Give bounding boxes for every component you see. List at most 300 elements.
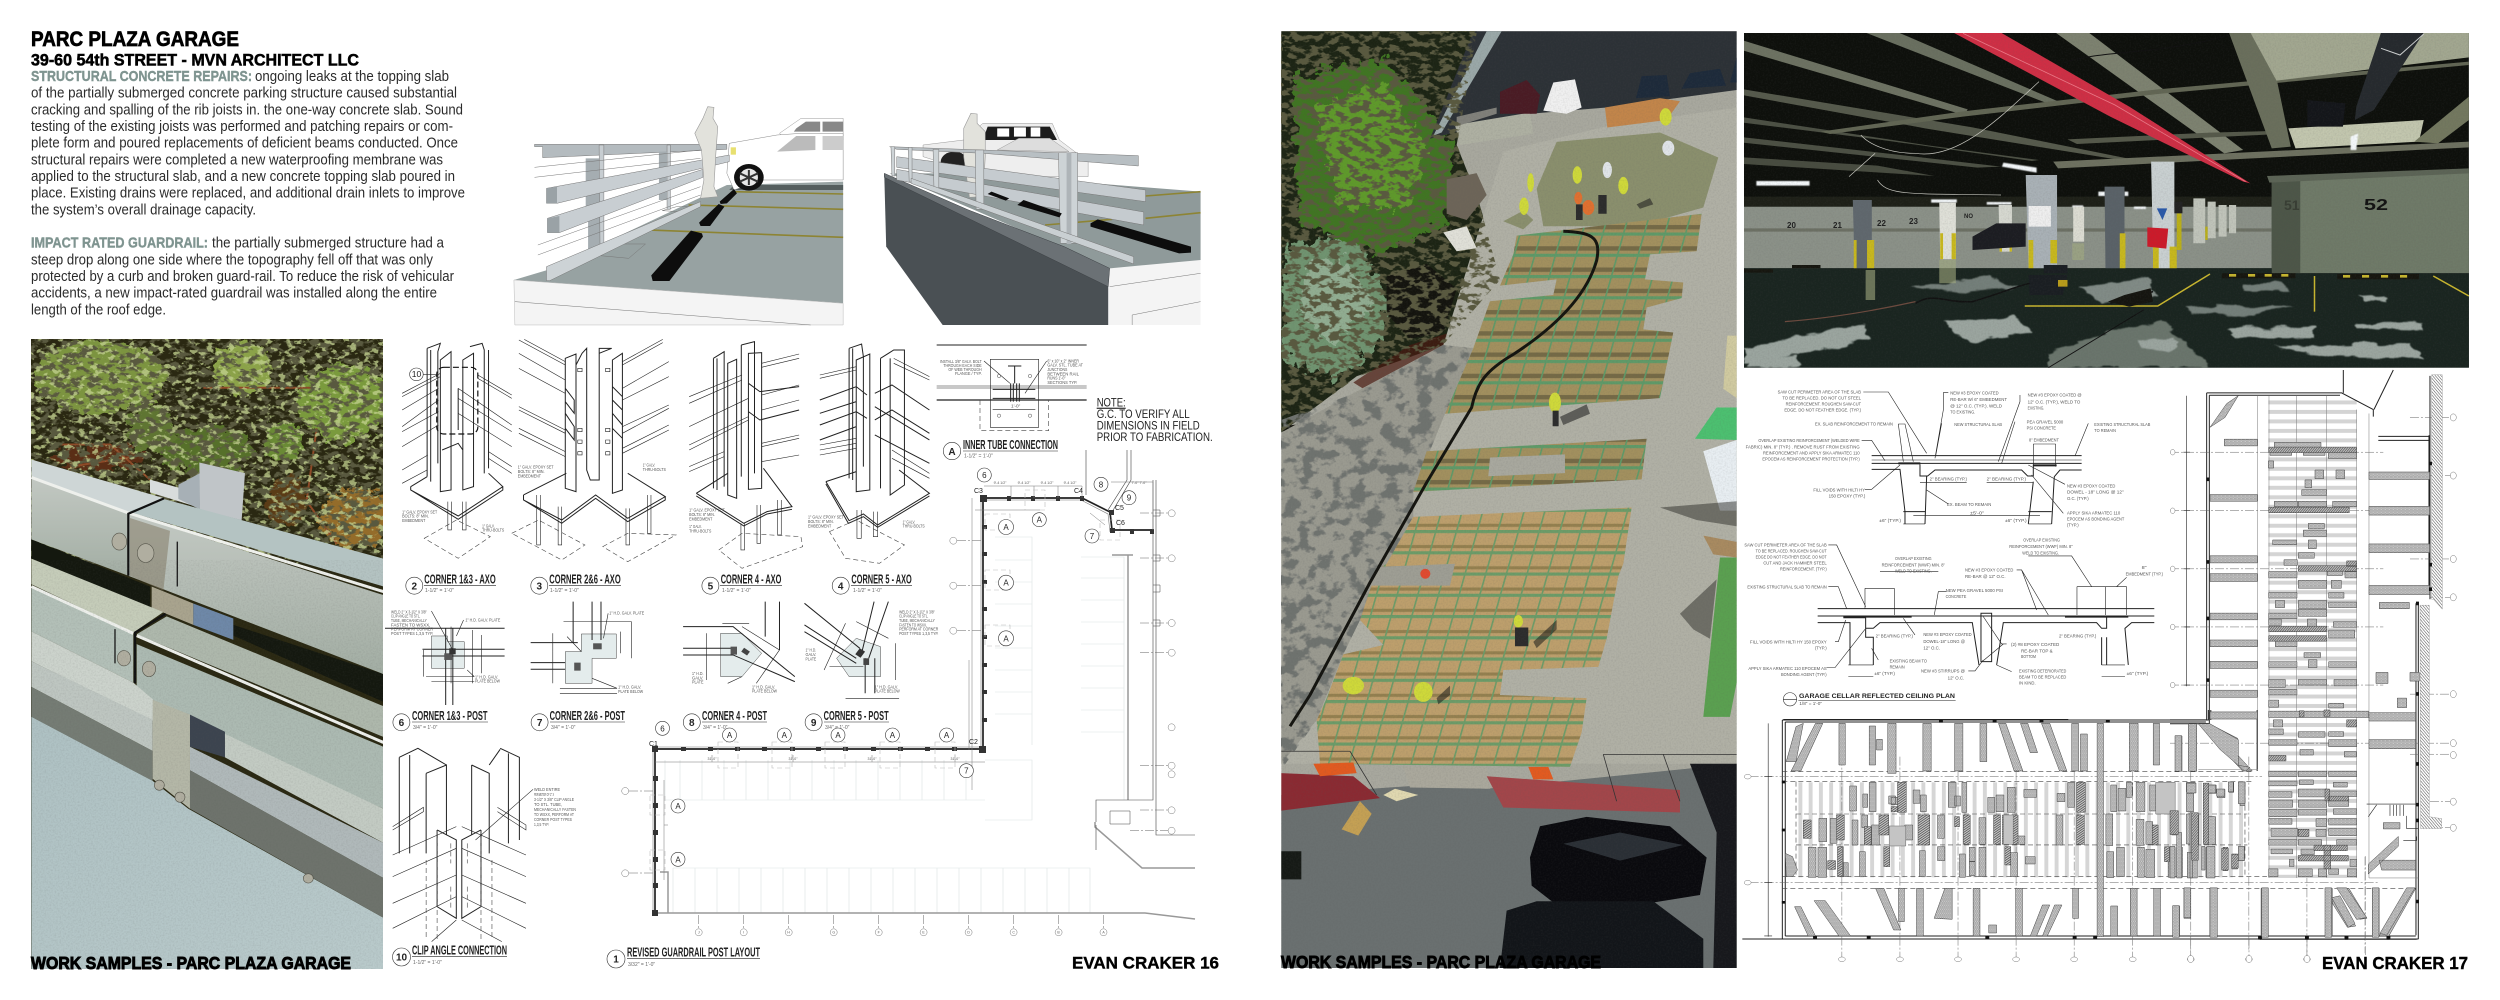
text block: impact rated guardrail: protected by a curb and broken guard-rail. To reduce the risk of vehicular xyxy=(31,268,454,285)
title: inner tube connection: A xyxy=(948,447,956,458)
title: PARC PLAZA GARAGE xyxy=(31,28,239,51)
section: lower beam replacement: 2" BEARING (TYP.) xyxy=(1876,633,1913,638)
section: upper slab repair: RE-BAR W/ 6" EMBEDMENT xyxy=(1950,397,2007,402)
plan labels and markers: A xyxy=(835,731,841,740)
plan labels and markers: A xyxy=(727,731,733,740)
title: corner 4 post: 8 xyxy=(689,718,695,729)
plan labels and markers: A xyxy=(1003,579,1009,588)
section: upper slab repair: 2" BEARING (TYP.) xyxy=(1930,476,1967,481)
section: upper slab repair: DOWEL - 18" LONG @ 12" xyxy=(2067,490,2124,495)
text block: impact rated guardrail xyxy=(31,235,454,318)
post detail: corner 5: TUBE, MECHANICALLY xyxy=(899,618,935,624)
ceiling lights xyxy=(1756,133,2358,209)
bolts and seams xyxy=(112,498,313,883)
plan labels and markers: 7'-0" xyxy=(1140,481,1147,485)
plan labels and markers: C6 xyxy=(1116,520,1125,527)
drawing: clip angle connection xyxy=(393,748,533,942)
section: lower beam replacement: OVERLAP EXISTING xyxy=(2023,538,2060,543)
footer caption, page 16: WORK SAMPLES - PARC PLAZA GARAGE xyxy=(31,953,351,973)
grid bubbles xyxy=(1744,774,2310,962)
drawing: inner tube connection: SECTIONS TYP. xyxy=(1047,380,1077,385)
post detail: corner 5: 1" H.D. GALV. xyxy=(875,684,898,690)
evergreen foliage xyxy=(31,339,393,564)
section: lower beam replacement: BOTTOM xyxy=(2021,654,2036,659)
axo: corner 1&3: BOLTS: 8" MIN. xyxy=(402,514,429,520)
guardrail posts and rails xyxy=(890,147,1146,264)
axo: corner 5: BOLTS: 8" MIN. xyxy=(808,519,834,525)
wheel stops xyxy=(988,192,1191,253)
post detail: corner 5: 1" H.D. xyxy=(806,648,816,654)
note: clip angle weld: 3-1/2" X 3/8" CLIP ANGLE xyxy=(534,797,574,802)
section: upper slab repair: EPOCEM AS REINFORCEMENT PROTECTION (TYP.) xyxy=(1762,457,1860,462)
plan labels and markers: D xyxy=(967,930,970,934)
plan labels and markers: C xyxy=(1012,930,1015,934)
plan labels and markers: J xyxy=(698,930,700,934)
section: upper slab repair: NEW STRUCTURAL SLAB xyxy=(1954,422,2002,427)
subtitle: 39-60 54th STREET - MVN ARCHITECT LLC xyxy=(31,50,359,70)
drawing titles xyxy=(392,571,912,968)
plan labels and markers: A xyxy=(1003,634,1009,643)
section: upper slab repair: EXISTING STRUCTURAL SLAB xyxy=(2094,422,2150,427)
text block: structural concrete repairs: place. Existing drains were replaced, and additional drain inlets to improve xyxy=(31,185,465,202)
photo: galvanized guardrail joint xyxy=(31,339,393,971)
plan labels and markers: F xyxy=(878,930,880,934)
section: upper slab repair: PEA GRAVEL 5000 xyxy=(2027,419,2064,424)
trees and undergrowth xyxy=(1281,31,1484,432)
workers xyxy=(1343,108,1674,704)
red sprinkler pipe xyxy=(1954,33,2250,183)
section: lower beam replacement: EXISTING STRUCTURAL SLAB TO REMAIN xyxy=(1747,584,1827,589)
plan labels and markers: I xyxy=(743,930,744,934)
note: clip angle weld: CORNER POST TYPES xyxy=(534,817,572,822)
drawing: structural repair sections xyxy=(1744,390,2163,719)
columns xyxy=(1782,720,2390,939)
plan labels and markers: 9'-4 1/2" xyxy=(994,481,1007,485)
section: upper slab repair: PSI CONCRETE xyxy=(2027,425,2056,430)
drawing: inner tube connection: RUNS 1'-0" xyxy=(1047,376,1066,381)
title: corner 1&3 post: 3/4" = 1'-0" xyxy=(413,725,438,731)
title: clip angle connection: 10 xyxy=(396,952,407,964)
panel: 3D rendering of guardrail, outside elevation xyxy=(884,113,1201,325)
title: corner 2&6 axo: CORNER 2&6 - AXO xyxy=(549,571,621,586)
text block: impact rated guardrail: steep drop along one side where the topography fell off that was only xyxy=(31,251,433,268)
title: corner 2&6 axo: 1-1/2" = 1'-0" xyxy=(550,588,579,594)
title: corner 1&3 axo: 2 xyxy=(412,582,418,592)
plan labels and markers: 31'-0" xyxy=(951,757,960,761)
section: upper slab repair: REINFORCEMENT. ROUGHEN SAW-CUT xyxy=(1786,402,1861,407)
axo: corner 4: EMBEDMENT xyxy=(689,516,712,522)
drawing: revised guardrail post layout plan xyxy=(622,450,1195,936)
post detail: corner 4: 1" H.D. xyxy=(692,671,703,677)
text block: structural concrete repairs: of the partially submerged concrete parking structure caused substantial xyxy=(31,85,457,102)
section: upper slab repair: FILL VOIDS WITH HILTI HY xyxy=(1813,487,1865,492)
plan labels and markers: A xyxy=(1037,516,1043,525)
text block: structural concrete repairs xyxy=(31,68,465,218)
section: upper slab repair: TO REMAIN xyxy=(2094,428,2116,433)
title: revised guardrail post layout: 1 xyxy=(613,954,619,966)
white car xyxy=(727,118,843,191)
axo: corner 1&3: 1" GALV. xyxy=(482,523,495,529)
post detail: corner 5: PLATE BELOW xyxy=(875,689,900,695)
text block: impact rated guardrail: IMPACT RATED GUARDRAIL: xyxy=(31,235,208,252)
drawing: inner tube connection xyxy=(937,345,1087,431)
section: lower beam replacement xyxy=(1744,538,2163,685)
title: revised guardrail post layout: 3/32" = 1'-0" xyxy=(628,962,655,968)
section: upper slab repair: EXISTING. xyxy=(2028,405,2044,410)
section: upper slab repair: 12" O.C. (TYP.), WELD TO xyxy=(2028,399,2081,404)
axo: corner 4: THRU-BOLTS xyxy=(689,528,711,534)
plan labels and markers: A xyxy=(1102,930,1105,934)
post detail: corner 2&6 xyxy=(531,602,645,695)
section: lower beam replacement: REINFORCEMENT (WWF) MIN. 8" xyxy=(2009,544,2073,549)
plan labels and markers: 7'-0" xyxy=(1132,481,1139,485)
section: lower beam replacement: TO BE REPLACED. ROUGHEN SAW-CUT xyxy=(1756,549,1827,554)
title: corner 5 post xyxy=(805,708,889,731)
title: corner 2&6 post xyxy=(531,708,625,731)
post detail: corner 1&3: CLIP ANGLE TO STL. xyxy=(391,614,420,620)
upper rail xyxy=(31,460,383,674)
section: upper slab repair: ±6" (TYP.) xyxy=(1879,518,1901,523)
numbers on walls xyxy=(1787,199,2388,228)
title: clip angle connection xyxy=(392,942,507,966)
wheel stops xyxy=(651,189,737,281)
post detail: corner 1&3: 1" H.D. GALV. PLATE xyxy=(465,618,501,624)
lower rail xyxy=(31,559,383,809)
note: verify dimensions xyxy=(1097,398,1213,444)
post detail: corner 4: PLATE xyxy=(692,680,704,686)
axo: corner 2&6 xyxy=(512,339,676,562)
post detail: corner 5 xyxy=(804,602,939,698)
post detail: corner 1&3: WELD 2" X 3-1/2" X 3/8" xyxy=(391,609,427,615)
section: lower beam replacement: EXISTING BEAM TO xyxy=(1890,658,1927,663)
plan labels and markers: 6 xyxy=(982,471,987,480)
drawing: inner tube connection: GALV. STL. TUBE AT xyxy=(1047,363,1083,368)
text block: impact rated guardrail: the partially submerged structure had a xyxy=(212,235,445,252)
section: lower beam replacement: REMAIN xyxy=(1890,664,1905,669)
note: clip angle weld: TO WSXX, PERFORM AT xyxy=(534,812,574,817)
fresh poured concrete xyxy=(1537,132,1718,226)
title: revised guardrail post layout xyxy=(607,945,760,968)
title: corner 2&6 post: 7 xyxy=(537,718,543,729)
title: inner tube connection: 1-1/2" = 1'-0" xyxy=(964,454,993,460)
text block: structural concrete repairs: cracking and spalling of the rib joists in. the one-way concrete slab. Sound xyxy=(31,101,463,118)
plan labels and markers: 8 xyxy=(1099,480,1104,489)
columns xyxy=(1852,162,2236,268)
title: garage cellar reflected ceiling plan xyxy=(1783,693,2068,719)
section: upper slab repair: (TYP.) xyxy=(2067,523,2079,528)
section: lower beam replacement: 8" xyxy=(2142,565,2147,570)
post stub behind the rail xyxy=(150,462,245,640)
axo: corner 5: 1" GALV. EPOXY SET xyxy=(808,515,844,521)
axo: corner 4: BOLTS: 8" MIN. xyxy=(689,512,715,518)
section: upper slab repair: NEW #3 EPOXY COATED xyxy=(2067,483,2116,488)
drawing: inner tube connection: 6" x 10" x 2" INNER xyxy=(1047,359,1079,364)
section: upper slab repair: O.C. (TYP.) xyxy=(2067,496,2089,501)
title: corner 1&3 axo: CORNER 1&3 - AXO xyxy=(424,571,496,586)
section: lower beam replacement: NEW PEA GRAVEL 5000 PSI xyxy=(1946,588,2003,593)
section: lower beam replacement: BONDING AGENT (TYP.) xyxy=(1781,672,1827,677)
drawing: inner tube connection: INSTALL 3/8" GALV. BOLT xyxy=(940,359,982,364)
section: lower beam replacement: CONCRETE xyxy=(1946,594,1966,599)
section: lower beam replacement: WELD TO EXISTING. xyxy=(1895,569,1932,574)
title: corner 1&3 post xyxy=(393,708,488,731)
numbers on walls: 21 xyxy=(1833,221,1842,230)
plan labels and markers: H xyxy=(787,930,790,934)
post detail: corner 5: FASTEN TO WSXX, xyxy=(899,622,927,628)
section: upper slab repair: EPOCEM AS BONDING AGENT xyxy=(2067,517,2124,522)
post detail: corner 4 xyxy=(683,602,795,695)
section: lower beam replacement: CUT AND JACK HAMMER STEEL xyxy=(1763,561,1827,566)
concrete pump hose xyxy=(1290,231,1598,726)
plan labels and markers: 9 xyxy=(1127,494,1132,503)
section: upper slab repair: SAW CUT PERIMETER AREA OF THE SLAB xyxy=(1778,390,1861,395)
drawing: ceiling plan, lower wing xyxy=(1742,710,2418,962)
drawing set: corner axonometrics and post details xyxy=(385,339,939,705)
plan labels and markers: 6 xyxy=(660,724,665,733)
footer page label 17: EVAN CRAKER 17 xyxy=(2322,953,2468,973)
section: lower beam replacement: (TYP.) xyxy=(1815,645,1827,650)
section: upper slab repair: @ 12" O.C. (TYP.). WELD xyxy=(1950,403,2003,408)
section: lower beam replacement: ±6" (TYP.) xyxy=(1874,671,1895,676)
section: lower beam replacement: (2) #8 EPOXY COATED xyxy=(2011,642,2060,647)
numbers on walls: 51 xyxy=(2284,197,2300,213)
section: lower beam replacement: APPLY SIKA ARMATEC 110 EPOCEM AS xyxy=(1748,666,1827,671)
text block: structural concrete repairs: structural repairs were completed a new waterproofing membrane was xyxy=(31,151,443,168)
note: clip angle weld xyxy=(534,787,576,827)
post detail: corner 5: CLIP ANGLE TO STL. xyxy=(899,614,928,620)
section: lower beam replacement: WELD TO EXISTING. xyxy=(2022,550,2059,555)
photo: wet garage interior with red sprinkler pipe xyxy=(1744,33,2469,368)
grid line bubbles xyxy=(622,510,1175,936)
note: verify dimensions: G.C. TO VERIFY ALL xyxy=(1097,409,1190,421)
section: lower beam replacement: ±6" (TYP.) xyxy=(2127,671,2149,676)
section: upper slab repair: NEW #3 EPOXY COATED @ xyxy=(2028,393,2082,398)
title: corner 5 axo xyxy=(832,571,912,594)
note: verify dimensions: PRIOR TO FABRICATION. xyxy=(1097,432,1213,444)
title: clip angle connection: CLIP ANGLE CONNECTION xyxy=(412,942,507,957)
detail markers A xyxy=(656,468,1136,866)
post detail: corner 4: 1" H.D. GALV. xyxy=(752,684,775,690)
section: lower beam replacement: 12" O.C. xyxy=(1923,645,1940,650)
plan labels and markers: A xyxy=(782,731,788,740)
plan labels and markers: C2 xyxy=(969,739,978,746)
posts xyxy=(652,495,1154,916)
dimension strings xyxy=(655,482,1153,880)
section: upper slab repair: APPLY SIKA ARMATEC 110 xyxy=(2067,510,2121,515)
numbers on walls: 52 xyxy=(2364,197,2388,214)
post detail: corner 1&3: PERFORM AT CORNER xyxy=(391,627,434,633)
post detail: corner 2&6: PLATE BELOW xyxy=(618,689,643,695)
section: upper slab repair: 2" BEARING (TYP.) xyxy=(1987,476,2026,481)
axo: corner 5 xyxy=(808,344,929,563)
hatched repair patches xyxy=(1803,782,2228,877)
plan labels and markers: 7 xyxy=(964,767,969,776)
title: corner 4 axo: 1-1/2" = 1'-0" xyxy=(722,588,751,594)
text block: structural concrete repairs: the system’s overall drainage capacity. xyxy=(31,201,256,218)
section: upper slab repair: 8" EMBEDMENT xyxy=(2029,438,2059,443)
axo: corner 2&6: 1" GALV. xyxy=(643,463,655,469)
curb and post base xyxy=(31,631,383,971)
title: garage cellar reflected ceiling plan: GARAGE CELLAR REFLECTED CEILING PLAN xyxy=(1799,693,1955,700)
axo: corner 2&6: EMBEDMENT xyxy=(518,473,541,479)
drawing: inner tube connection: JUNCTIONS xyxy=(1047,367,1067,372)
parking stalls (faint) xyxy=(665,537,1124,913)
tree canopy speckle xyxy=(1281,31,1500,432)
person figure xyxy=(695,107,718,198)
section: lower beam replacement: EXISTING DETERIORATED xyxy=(2019,669,2067,674)
section: lower beam replacement: REINFORCEMENT. (TYP.) xyxy=(1780,567,1827,572)
stippled repair patches xyxy=(1785,723,2416,937)
section: upper slab repair: EDGE. DO NOT FEATHER EDGE. (TYP.) xyxy=(1784,408,1861,413)
section: lower beam replacement: RE-BAR @ 12" O.C. xyxy=(1965,574,2006,579)
section: upper slab repair: ±6" (TYP.) xyxy=(2005,518,2027,523)
section: lower beam replacement: NEW #3 EPOXY COATED xyxy=(1923,632,1972,637)
title: corner 5 axo: 4 xyxy=(838,582,844,592)
parking stripes and wheel stops xyxy=(1744,265,2469,368)
text block: structural concrete repairs: plete form and poured replacements of deficient beams conducted. Once xyxy=(31,135,458,152)
plan labels and markers: A xyxy=(944,731,950,740)
numbers on walls: 23 xyxy=(1909,217,1918,226)
numbers on walls: 20 xyxy=(1787,221,1796,230)
parked cars xyxy=(923,123,1088,177)
axo: corner 1&3 xyxy=(402,343,512,558)
wet floor xyxy=(1744,243,2469,368)
post detail: corner 1&3 xyxy=(385,609,505,705)
title: inner tube connection: INNER TUBE CONNECTION xyxy=(963,437,1058,452)
section: lower beam replacement: REINFORCEMENT (WWF) MIN. 8" xyxy=(1882,562,1945,567)
plan labels and markers: C4 xyxy=(1074,488,1083,495)
large concrete girder at right xyxy=(2229,33,2469,148)
text block: structural concrete repairs: STRUCTURAL CONCRETE REPAIRS: xyxy=(31,68,252,85)
title: corner 4 axo: CORNER 4 - AXO xyxy=(721,571,781,586)
plan labels and markers: A xyxy=(675,855,681,864)
title: corner 4 axo: 5 xyxy=(708,582,714,592)
footer page label 16: EVAN CRAKER 16 xyxy=(1072,953,1219,972)
axo: corner 4: 1" GALV. xyxy=(689,524,702,530)
text block: impact rated guardrail: length of the roof edge. xyxy=(31,301,166,318)
concrete slab xyxy=(1362,108,1737,764)
black drain pipe xyxy=(2355,33,2424,120)
section: lower beam replacement: BEAM TO BE REPLACED xyxy=(2019,675,2067,680)
title: corner 1&3 axo: 1-1/2" = 1'-0" xyxy=(425,588,454,594)
plan labels and markers: 9'-4 1/2" xyxy=(1018,481,1031,485)
plan labels and markers: A xyxy=(1003,523,1009,532)
text block: structural concrete repairs: testing of the existing joists was performed and patching repairs or com- xyxy=(31,118,453,135)
section: lower beam replacement: NEW #3 STIRRUPS @ xyxy=(1921,669,1965,674)
title: corner 2&6 axo xyxy=(531,571,621,594)
post detail: corner 5: WELD 2" X 3-1/2" X 3/8" xyxy=(899,609,935,615)
plan labels and markers: 9'-4 1/2" xyxy=(1041,481,1054,485)
grid bubbles xyxy=(2170,414,2456,963)
section: upper slab repair: 150 EPOXY (TYP.) xyxy=(1829,494,1866,499)
hatched repair bands xyxy=(2170,447,2357,870)
axo: corner 1&3: THRU-BOLTS xyxy=(482,528,504,534)
numbers on walls: NO xyxy=(1964,214,1973,220)
drawing: inner tube connection: THROUGH EACH SIDE xyxy=(943,363,982,368)
person figure xyxy=(964,113,985,197)
title: corner 2&6 axo: 3 xyxy=(537,582,543,592)
axo: corner 2&6: BOLTS: 8" MIN. xyxy=(518,469,545,475)
text block: structural concrete repairs: ongoing leaks at the topping slab xyxy=(255,68,449,85)
title: corner 4 post: CORNER 4 - POST xyxy=(702,708,767,723)
hanging cables xyxy=(1849,82,2039,195)
ceiling beams xyxy=(1744,33,2469,176)
title: corner 1&3 axo xyxy=(406,571,496,594)
section: lower beam replacement: 2" BEARING (TYP.) xyxy=(2059,633,2097,638)
plan labels and markers: A xyxy=(675,802,681,811)
title: corner 4 post xyxy=(683,708,767,731)
photo: aerial view of rebar and slab pour xyxy=(1281,31,1737,969)
title: inner tube connection xyxy=(943,437,1058,460)
post detail: corner 5: POST TYPES 1,3,5 TYP. xyxy=(899,631,938,637)
section: upper slab repair: TO EXISTING. xyxy=(1950,409,1975,414)
plan labels and markers: G xyxy=(832,930,835,934)
note: clip angle weld: WELD ENTIRE xyxy=(534,787,560,792)
title: corner 2&6 post: 3/4" = 1'-0" xyxy=(551,725,576,731)
drawing: inner tube connection: OF WEB THROUGH xyxy=(948,367,982,372)
structural wall with number 52 xyxy=(2272,170,2469,273)
plan labels and markers: 31'-0" xyxy=(708,757,717,761)
axo: corner 2&6: THRU-BOLTS xyxy=(643,467,666,473)
dappled tree shadow on concrete xyxy=(1281,345,1470,765)
drawing: inner tube connection: BETWEEN RAIL xyxy=(1047,371,1079,376)
title: corner 2&6 post: CORNER 2&6 - POST xyxy=(550,708,625,723)
stair xyxy=(2367,804,2418,840)
panel: 3D rendering of guardrail, parking side xyxy=(514,107,843,325)
title: clip angle connection: 1-1/2" = 1'-0" xyxy=(413,960,442,966)
note: clip angle weld: MECHANICALLY FASTEN xyxy=(534,807,576,812)
axo: corner 5: THRU-BOLTS xyxy=(903,524,925,530)
plan labels and markers: 7 xyxy=(1090,532,1095,541)
hatched wall xyxy=(2420,375,2442,829)
title: corner 4 axo xyxy=(702,571,782,594)
axo: corner 1&3: EMBEDMENT xyxy=(402,518,425,524)
drawing: inner tube connection: FLANGE / TYP. xyxy=(955,371,982,376)
pressure washer and hoses xyxy=(1785,265,2153,322)
post detail: corner 1&3: POST TYPES 1,3,5 TYP. xyxy=(391,631,433,637)
section: lower beam replacement: EDGE DO NOT FEATHER EDGE. DO NOT xyxy=(1756,555,1827,560)
dark gaps behind the rails xyxy=(31,539,383,702)
axo: corner 4 xyxy=(689,342,803,568)
section: upper slab repair: ±5'-0" xyxy=(1970,510,1984,515)
building walls xyxy=(658,555,1195,919)
guardrail posts and rails xyxy=(535,144,729,281)
text block: structural concrete repairs: applied to the structural slab, and a new concrete topping slab poured in xyxy=(31,168,455,185)
post detail: corner 1&3: PLATE BELOW xyxy=(475,679,500,685)
plan labels and markers: B xyxy=(1057,930,1060,934)
note: clip angle weld: TO STL. TUBE, xyxy=(534,802,562,807)
note: clip angle weld: PERIMETER OF 2" X xyxy=(534,792,554,797)
text block: impact rated guardrail: accidents, a new impact-rated guardrail was installed along the entire xyxy=(31,285,437,302)
far wall xyxy=(1744,207,2272,268)
panel: project description text xyxy=(31,28,465,318)
section: upper slab repair: REINFORCEMENT AND APPLY SIKA ARMATEC 110 xyxy=(1763,451,1860,456)
plan labels and markers: C5 xyxy=(1115,505,1124,512)
section: lower beam replacement: NEW #3 EPOXY COATED xyxy=(1965,568,2014,573)
plan labels and markers: 31'-0" xyxy=(789,757,798,761)
post detail: corner 2&6: 1" H.D. GALV. PLATE xyxy=(609,611,645,617)
right edge materials xyxy=(1660,336,1737,717)
title: corner 1&3 post: 6 xyxy=(399,718,405,729)
section: lower beam replacement: DOWEL-18" LONG @ xyxy=(1923,639,1965,644)
section: upper slab repair: EX. SLAB REINFORCEMENT TO REMAIN xyxy=(1815,422,1893,427)
numbers on walls: 22 xyxy=(1877,219,1886,228)
note: verify dimensions: DIMENSIONS IN FIELD xyxy=(1097,420,1200,432)
section: upper slab repair: OVERLAP EXISTING REINFORCEMENT (WELDED WIRE xyxy=(1758,438,1860,443)
post detail: corner 2&6: 1" H.D. GALV. xyxy=(618,685,641,691)
axo: corner 5: 1" GALV. xyxy=(903,519,915,525)
drawing: ceiling plan, upper wing xyxy=(2170,370,2457,963)
